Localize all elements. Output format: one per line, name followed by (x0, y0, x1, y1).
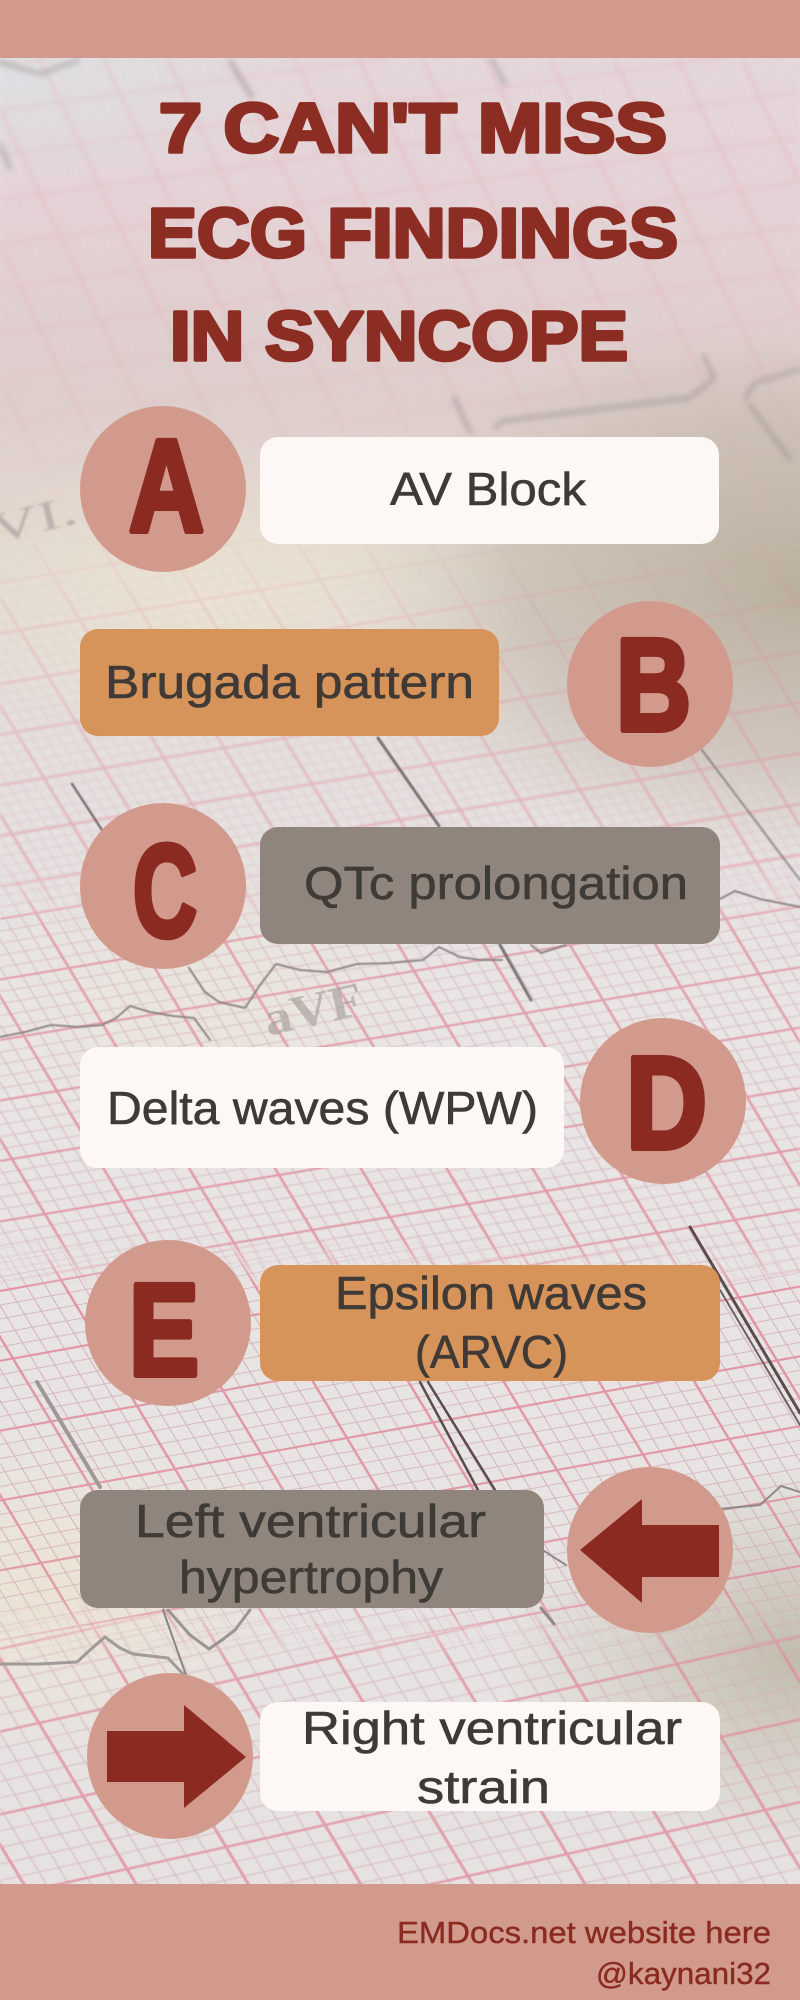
badge D (580, 1018, 746, 1184)
badge D: D (626, 1029, 707, 1176)
badge A: A (129, 412, 204, 559)
title: ECG FINDINGS (148, 194, 678, 272)
badge B: B (616, 611, 691, 758)
label: QTc prolongation (260, 827, 720, 944)
badge: right arrow (87, 1673, 253, 1839)
badge A (80, 406, 246, 572)
badge E: E (129, 1256, 199, 1403)
label: Left ventricular hypertrophy: hypertrophy (179, 1551, 443, 1603)
label: Right ventricular strain (260, 1702, 720, 1813)
footer credits: @kaynani32 (596, 1956, 771, 1991)
badge B (567, 601, 733, 767)
badge E (85, 1240, 251, 1406)
top banner (0, 0, 800, 58)
row A: AV Block (80, 406, 719, 572)
row: Left ventricular hypertrophy (80, 1467, 733, 1633)
row D: Delta waves (80, 1018, 746, 1184)
label: Brugada pattern (80, 629, 499, 736)
label: Right ventricular strain: Right ventricular (302, 1702, 682, 1754)
badge C (80, 803, 246, 969)
label: AV Block (260, 437, 719, 544)
row B: Brugada pattern (80, 601, 733, 767)
label: Left ventricular hypertrophy: Left ventricular (135, 1495, 486, 1547)
label: Delta waves (WPW) (80, 1047, 564, 1168)
label: Left ventricular hypertrophy (80, 1490, 544, 1608)
row: Right ventricular strain (87, 1673, 720, 1839)
label: Brugada pattern: Brugada pattern (105, 656, 474, 708)
row C: QTc prolongation (80, 803, 720, 969)
badge C: C (133, 817, 197, 964)
footer credits (397, 1915, 771, 1991)
label: Epsilon waves (ARVC) (260, 1265, 720, 1381)
title: IN SYNCOPE (170, 297, 628, 375)
badge: left arrow (567, 1467, 733, 1633)
label: Epsilon waves (ARVC): (ARVC) (415, 1326, 568, 1378)
label: Delta waves (WPW): Delta waves (WPW) (107, 1082, 538, 1134)
row E: Epsilon waves (85, 1240, 720, 1406)
background: ECG paper photograph: aVF (259, 973, 368, 1047)
footer banner (0, 1884, 800, 2000)
title: 7 CAN'T MISS (159, 89, 667, 167)
label: Epsilon waves (ARVC): Epsilon waves (335, 1267, 647, 1319)
label: AV Block: AV Block (390, 463, 587, 515)
title (148, 89, 678, 375)
label: Right ventricular strain: strain (417, 1761, 550, 1813)
label: QTc prolongation: QTc prolongation (304, 857, 688, 909)
footer credits: EMDocs.net website here (397, 1915, 771, 1950)
